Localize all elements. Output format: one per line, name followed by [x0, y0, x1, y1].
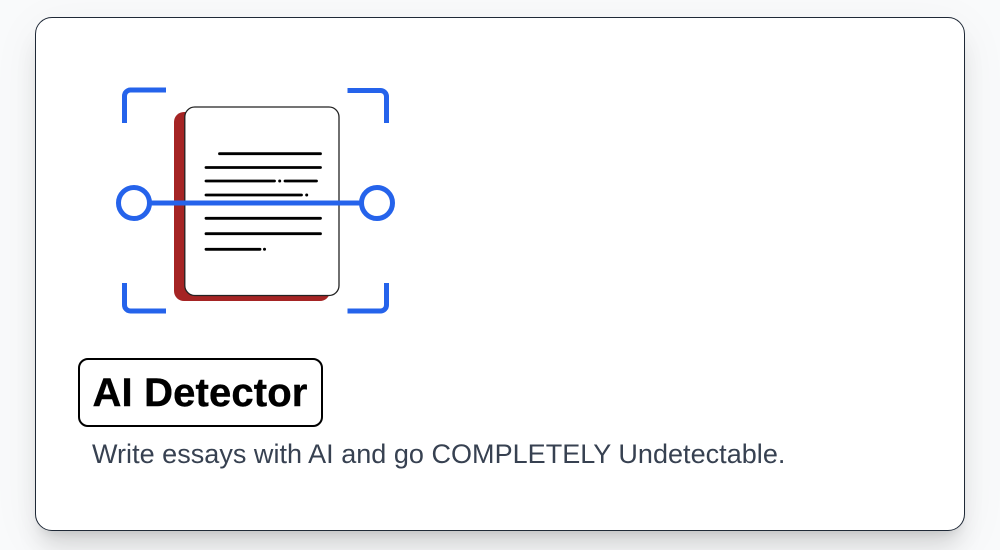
icon: white document page: [185, 107, 339, 296]
heading: AI Detector label: AI Detector: [92, 371, 308, 415]
icon: document scanner: [116, 88, 395, 314]
heading: AI Detector label: [78, 358, 323, 426]
icon: scan line with end circles: [118, 188, 392, 218]
icon: scan frame corners: [124, 90, 386, 311]
icon: document text lines: [206, 154, 320, 251]
icon: red back page: [174, 112, 330, 301]
text: description: Write essays with AI and go COMPLETELY Undetectable.: [92, 439, 785, 469]
